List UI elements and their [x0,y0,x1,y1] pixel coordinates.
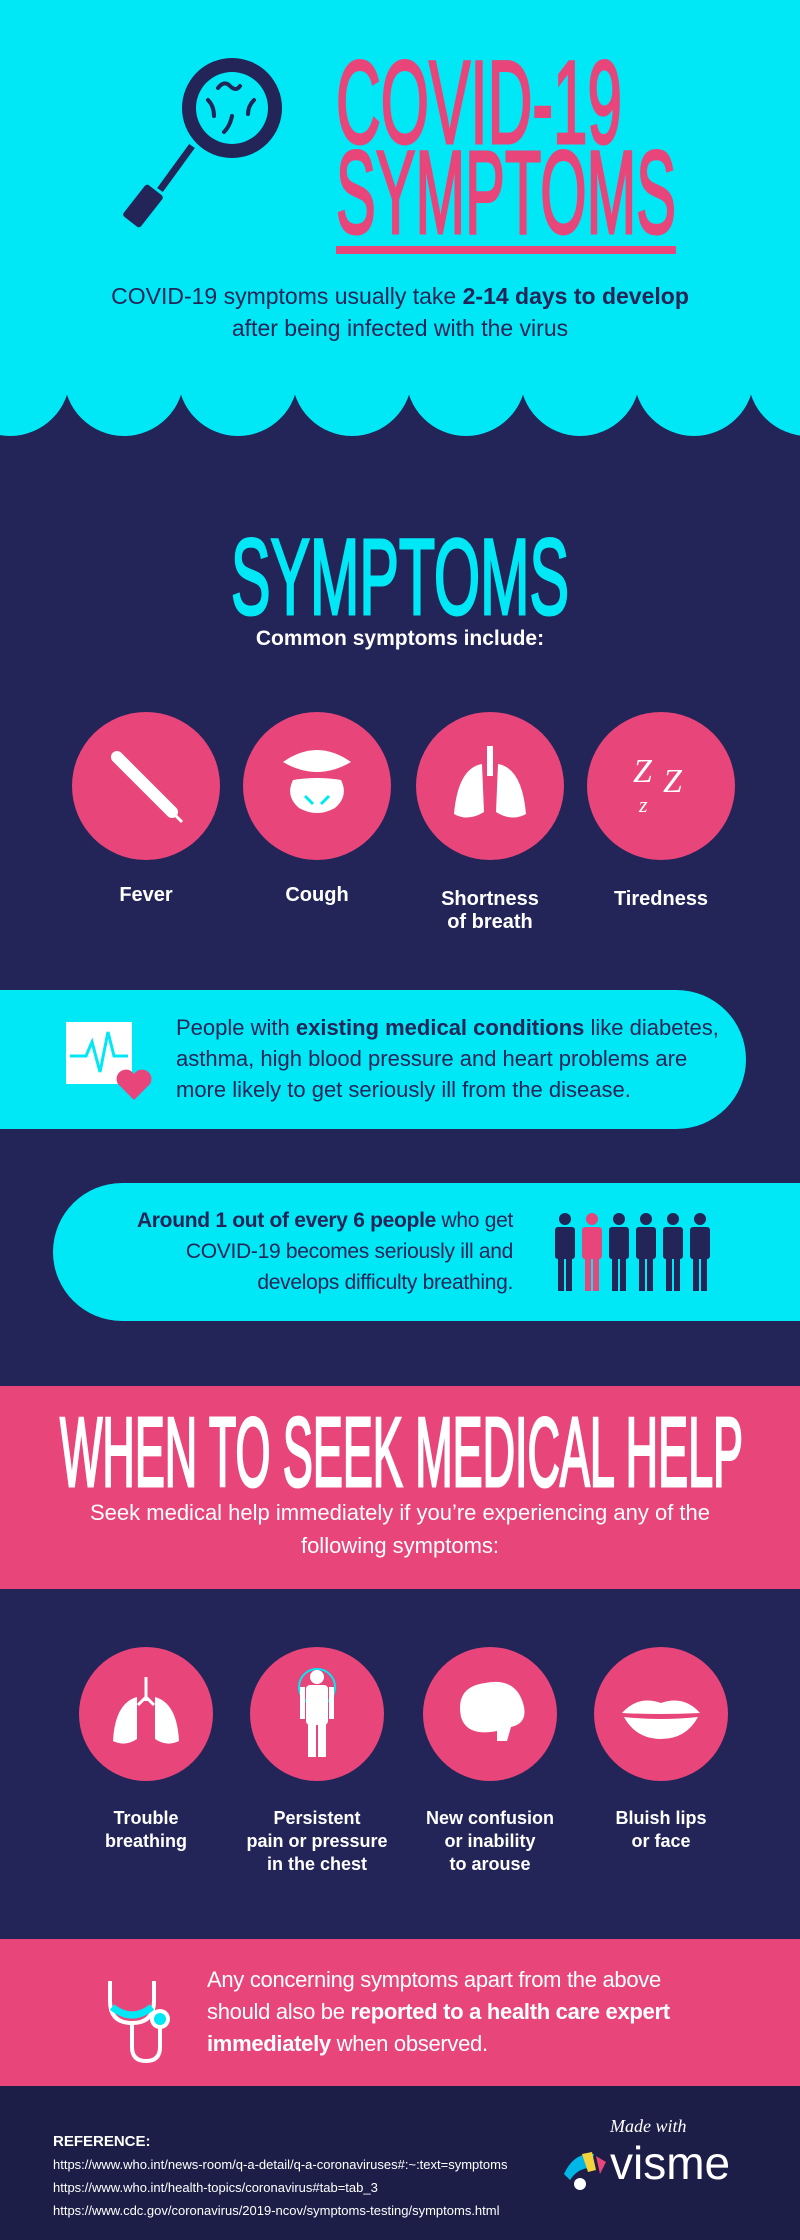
icon: brain [423,1647,557,1781]
icon: tiredness: Z [633,753,653,790]
label: chest pain: Persistent [273,1808,361,1828]
subtitle [111,283,689,341]
label: confusion: to arouse [449,1854,531,1874]
label: bluish lips: Bluish lips [615,1808,706,1828]
subtitle: after being infected with the virus [232,315,568,341]
label: trouble breathing [105,1808,187,1851]
icon: lips [594,1647,728,1781]
label: chest pain: in the chest [267,1854,367,1874]
icon: cough [243,712,391,860]
label: confusion: New confusion [426,1808,554,1828]
label: fever: Fever [119,884,173,906]
text: Around 1 out of every 6 people who get [137,1209,513,1232]
label: confusion: or inability [444,1831,536,1851]
text: People with existing medical conditions like diabetes, asthma, high blood pressure and heart problems are more likely to get seriously ill from the disease. [176,1015,719,1102]
subheading: common symptoms: Common symptoms include: [256,627,544,650]
subtitle: Seek medical help immediately if you’re experiencing any of the following symptoms: [90,1500,710,1558]
icon: tiredness: z [638,792,648,817]
icon: six people [555,1213,710,1291]
icon: tiredness: Z [663,763,683,800]
text: Any concerning symptoms apart from the above [207,1967,661,1992]
header background with scallops [0,0,800,436]
emergency icons row [79,1647,728,1874]
icon: magnifying glass with virus [123,58,282,228]
footer [0,2086,800,2240]
text [137,1209,514,1294]
text: should also be reported to a health care expert [207,1999,670,2024]
icon: trouble breathing [79,1647,213,1781]
label: trouble breathing: Trouble [113,1808,178,1828]
label: shortness of breath: of breath [447,911,533,933]
references: REFERENCE: [53,2133,151,2150]
label: chest pain: pain or pressure [246,1831,388,1851]
icon: heart monitor [66,1022,152,1100]
text [207,1967,670,2056]
label: bluish lips: or face [631,1831,691,1851]
icon: fever [72,712,220,860]
title [336,37,676,259]
icon: tiredness [587,712,735,860]
references: https://www.cdc.gov/coronavirus/2019-ncov/symptoms-testing/symptoms.html [53,2203,500,2218]
icon: stethoscope [108,1981,170,2063]
logo: made with visme: Made with [610,2116,686,2136]
label: chest pain [246,1808,388,1874]
callout: 1 in 6 [53,1183,800,1321]
panel: concerning symptoms callout [0,1939,800,2086]
label: confusion [426,1808,554,1874]
icon: lungs [416,712,564,860]
panel: when to seek medical help [0,1386,800,1589]
label: cough: Cough [285,884,349,906]
subtitle: COVID-19 symptoms usually take 2-14 days to develop [111,283,689,309]
label: trouble breathing: breathing [105,1831,187,1851]
references [53,2133,507,2218]
label: bluish lips [615,1808,706,1851]
references: https://www.who.int/news-room/q-a-detail/q-a-coronaviruses#:~:text=symptoms [53,2157,507,2172]
text: develops difficulty breathing. [257,1271,513,1294]
label: tiredness: Tiredness [614,888,708,910]
text: immediately when observed. [207,2031,488,2056]
logo: made with visme: visme [610,2137,730,2189]
logo: made with visme [564,2116,730,2190]
label: shortness of breath [441,888,539,933]
label: shortness of breath: Shortness [441,888,539,910]
symptom icons row [72,712,735,933]
text: COVID-19 becomes seriously ill and [186,1240,513,1263]
references: https://www.who.int/health-topics/coronavirus#tab=tab_3 [53,2180,378,2195]
icon: chest pain [250,1647,384,1781]
callout: existing conditions [0,990,746,1129]
